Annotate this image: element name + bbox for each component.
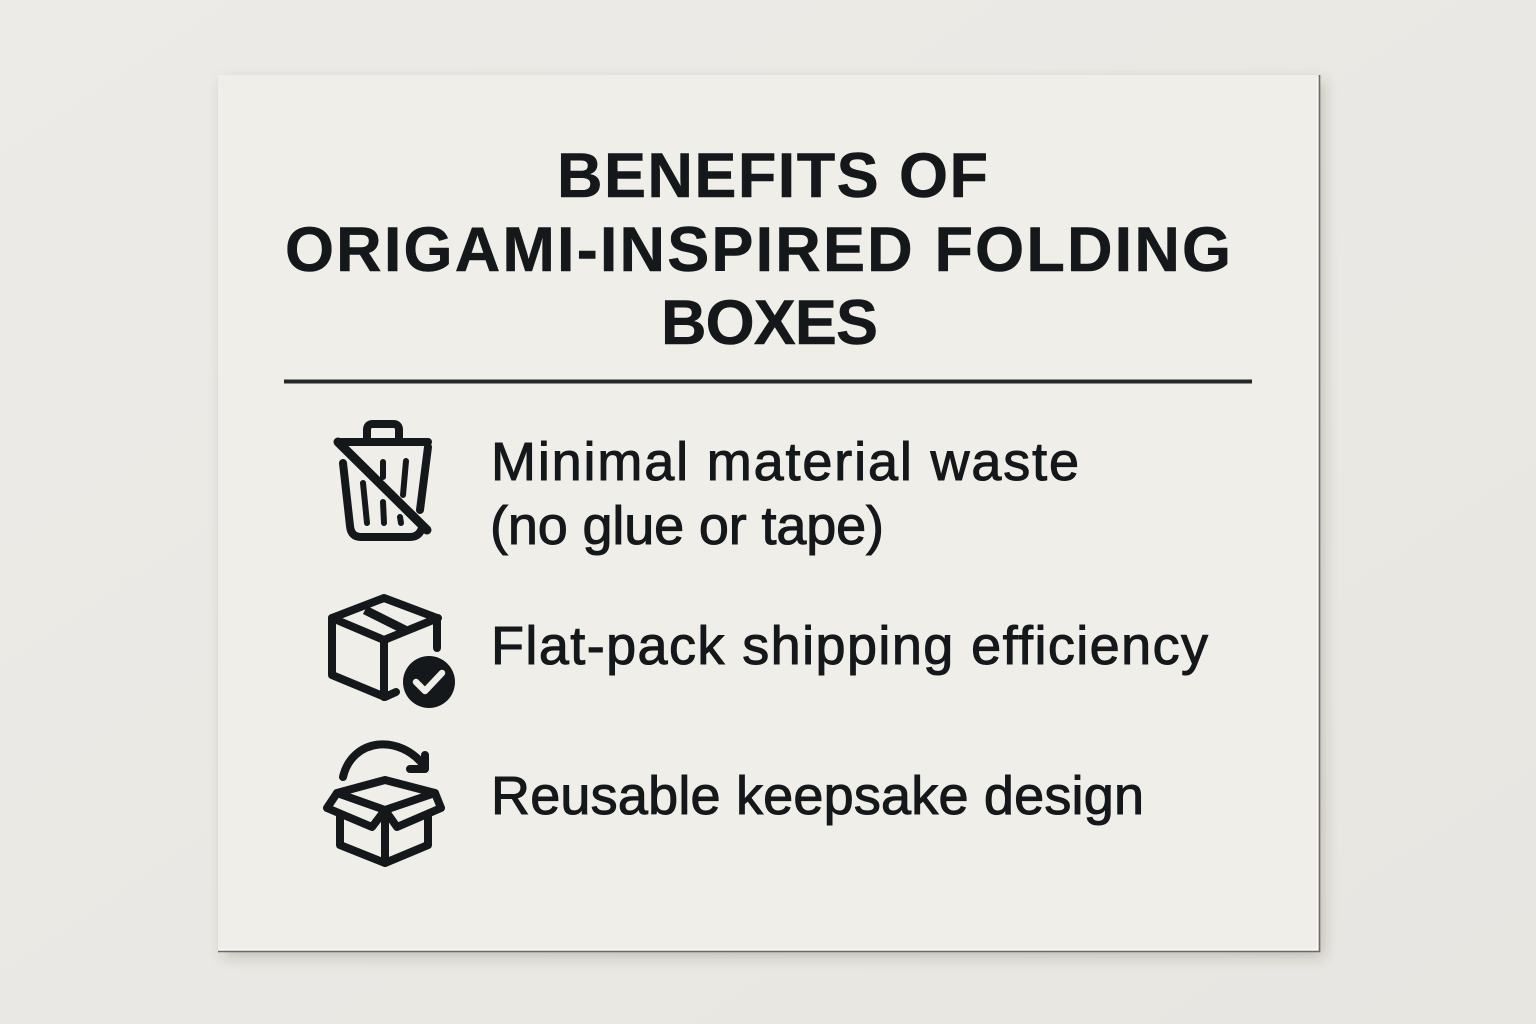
title: BOXES: [661, 288, 878, 358]
title: [285, 141, 1231, 358]
text: minimal material waste: Minimal material waste: [491, 432, 1079, 492]
text: flat-pack shipping efficiency: Flat-pack shipping efficiency: [491, 616, 1208, 676]
title: ORIGAMI-INSPIRED FOLDING: [285, 215, 1231, 285]
text: reusable keepsake design: Reusable keepsake design: [491, 766, 1144, 826]
icon: reusable open box with arrow: [327, 744, 441, 863]
icon: crossed-out trash can: [338, 424, 428, 537]
panel: card: [218, 75, 1320, 952]
text: minimal material waste: [490, 432, 1079, 556]
title: BENEFITS OF: [557, 141, 988, 211]
text: minimal material waste: (no glue or tape): [490, 496, 884, 556]
icon: box with check badge: [332, 598, 455, 708]
